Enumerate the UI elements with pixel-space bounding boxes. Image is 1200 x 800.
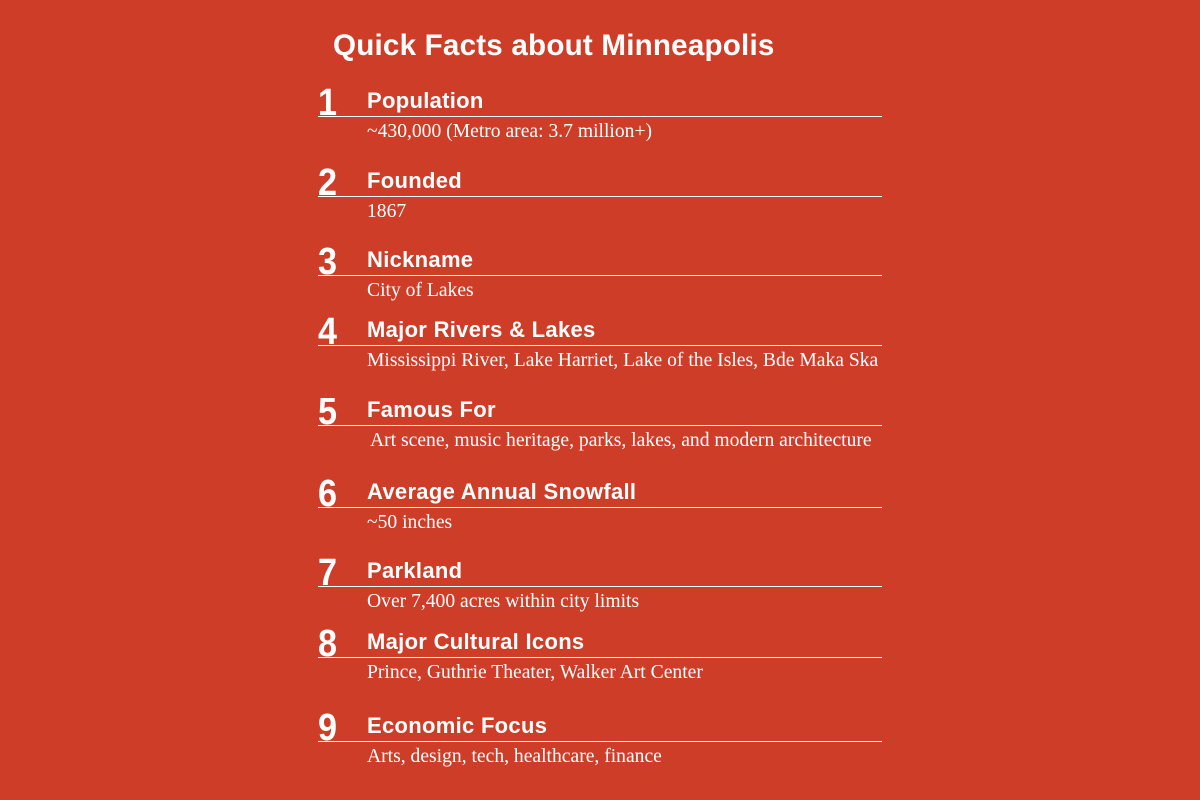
fact 3 — [318, 241, 882, 301]
fact 9: Economic Focus — [367, 713, 547, 738]
fact 3: Nickname — [367, 247, 473, 272]
fact 6: 6 — [318, 473, 337, 515]
fact 6: Average Annual Snowfall — [367, 479, 636, 504]
fact 2: Founded — [367, 168, 462, 193]
fact 2: 1867 — [367, 201, 406, 222]
fact 8 — [318, 623, 882, 683]
fact 9 — [318, 707, 882, 767]
fact 7: 7 — [318, 552, 337, 594]
fact 4: Major Rivers & Lakes — [367, 317, 596, 342]
fact 9: Arts, design, tech, healthcare, finance — [367, 746, 662, 767]
fact 2: 2 — [318, 162, 337, 204]
fact 7 — [318, 552, 882, 612]
fact 5: Famous For — [367, 397, 496, 422]
title: Quick Facts about Minneapolis — [333, 29, 775, 62]
fact 1: ~430,000 (Metro area: 3.7 million+) — [367, 121, 652, 142]
fact 7: Over 7,400 acres within city limits — [367, 591, 639, 612]
fact 1 — [318, 82, 882, 142]
fact 4 — [318, 311, 882, 371]
fact 4: Mississippi River, Lake Harriet, Lake of the Isles, Bde Maka Ska — [367, 350, 878, 371]
fact 6: ~50 inches — [367, 512, 452, 533]
fact 9: 9 — [318, 707, 337, 749]
fact 8: Prince, Guthrie Theater, Walker Art Center — [367, 662, 703, 683]
fact 7: Parkland — [367, 558, 462, 583]
fact 1: 1 — [318, 82, 337, 124]
fact 8: 8 — [318, 623, 337, 665]
fact 5: Art scene, music heritage, parks, lakes, and modern architecture — [370, 430, 872, 451]
fact 3: City of Lakes — [367, 280, 474, 301]
fact 6 — [318, 473, 882, 533]
fact 1: Population — [367, 88, 484, 113]
fact 3: 3 — [318, 241, 337, 283]
fact 5: 5 — [318, 391, 337, 433]
fact 4: 4 — [318, 311, 337, 353]
fact 2 — [318, 162, 882, 222]
fact 8: Major Cultural Icons — [367, 629, 584, 654]
fact 5 — [318, 391, 882, 451]
